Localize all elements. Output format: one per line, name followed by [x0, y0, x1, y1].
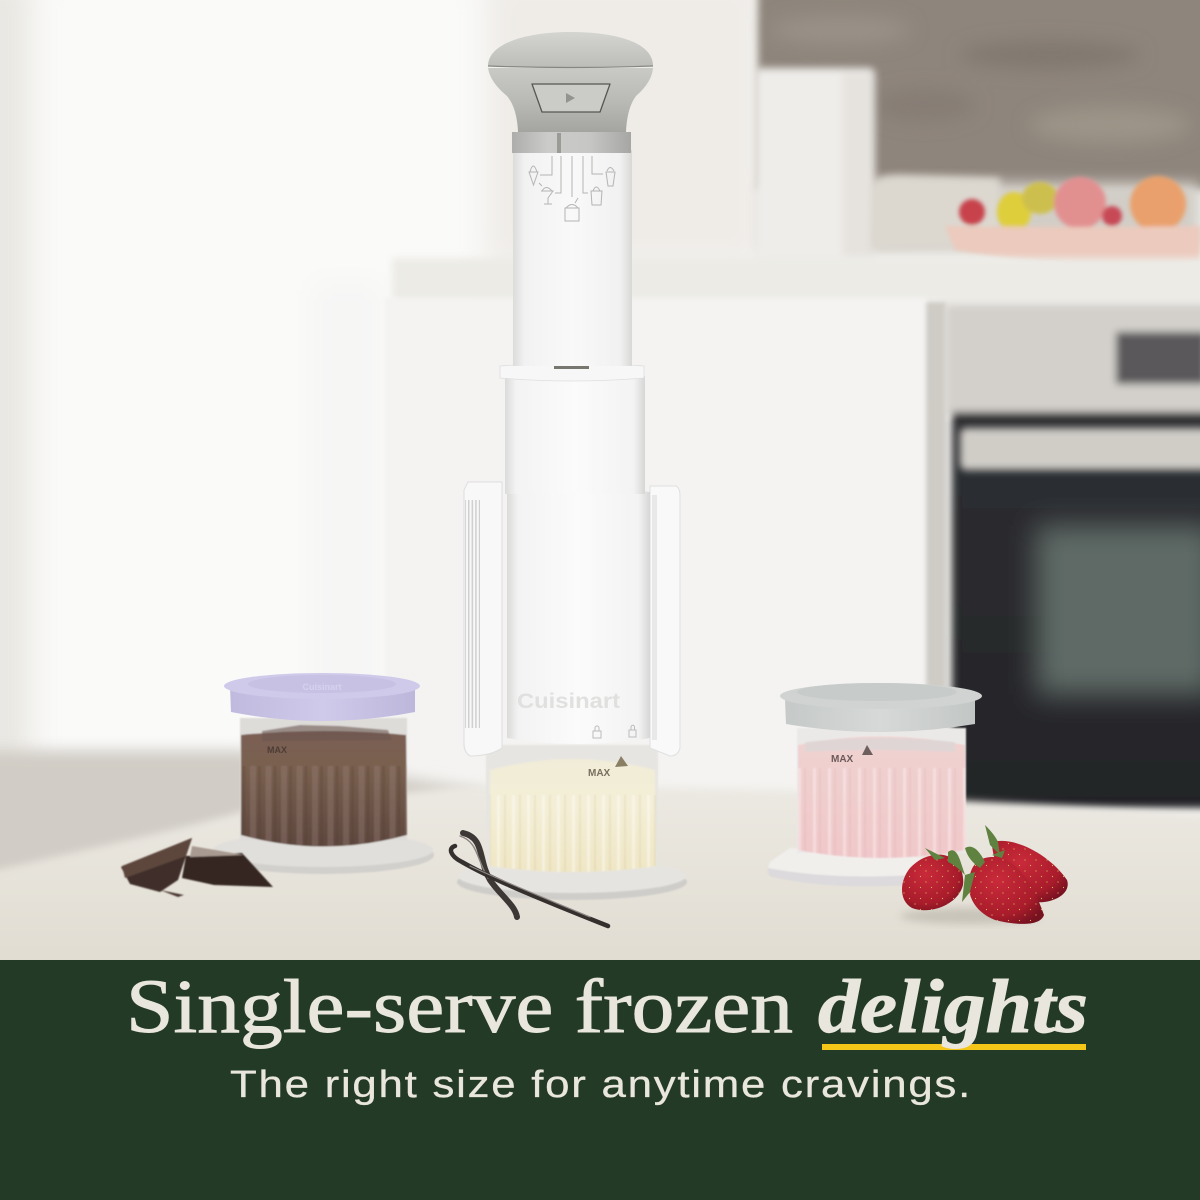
- start button: [532, 84, 610, 112]
- chocolate jar: [212, 673, 434, 874]
- headline: Single-serve frozen: [126, 965, 793, 1049]
- blender body: [464, 32, 680, 756]
- leaves: [925, 825, 1005, 902]
- back strawberry: [992, 841, 1068, 902]
- purple lid: Cuisinart: [302, 682, 342, 692]
- blurred kitchen background: [0, 0, 1200, 960]
- left strawberry: [902, 855, 963, 910]
- chocolate pieces: [121, 838, 273, 897]
- bowl of fruit: [870, 175, 1200, 264]
- middle sleeve: [500, 363, 645, 494]
- headline underline: [822, 1044, 1086, 1050]
- grey collar: [512, 132, 631, 153]
- white canister: [755, 68, 875, 262]
- headline: [126, 965, 1088, 1049]
- lower housing: [507, 488, 650, 744]
- purple lid: [224, 673, 420, 721]
- lower housing wings: [464, 482, 680, 756]
- lock icons: [593, 725, 636, 738]
- mode icons: [529, 156, 615, 221]
- oven: [945, 304, 1200, 808]
- counter top: [0, 750, 1200, 970]
- brand mark: Cuisinart: [517, 690, 620, 713]
- worktop and cabinets: [385, 258, 1200, 788]
- strawberry jar: [768, 683, 982, 886]
- grey cap: [488, 32, 653, 132]
- vanilla jar on disk: [457, 745, 687, 900]
- MAX marker: [588, 756, 628, 779]
- upper tube: [513, 150, 632, 366]
- label: MAX: MAX: [831, 754, 854, 765]
- MAX marker: MAX: [588, 768, 611, 779]
- headline: delights: [818, 965, 1088, 1049]
- subheading: The right size for anytime cravings.: [230, 1064, 972, 1106]
- vanilla pods: [451, 833, 608, 926]
- label: MAX: MAX: [267, 745, 287, 755]
- front strawberry: [969, 857, 1044, 924]
- backsplash: [758, 0, 1200, 252]
- caption band: [0, 960, 1200, 1200]
- strawberries: [900, 825, 1068, 924]
- grey lid: [780, 683, 982, 732]
